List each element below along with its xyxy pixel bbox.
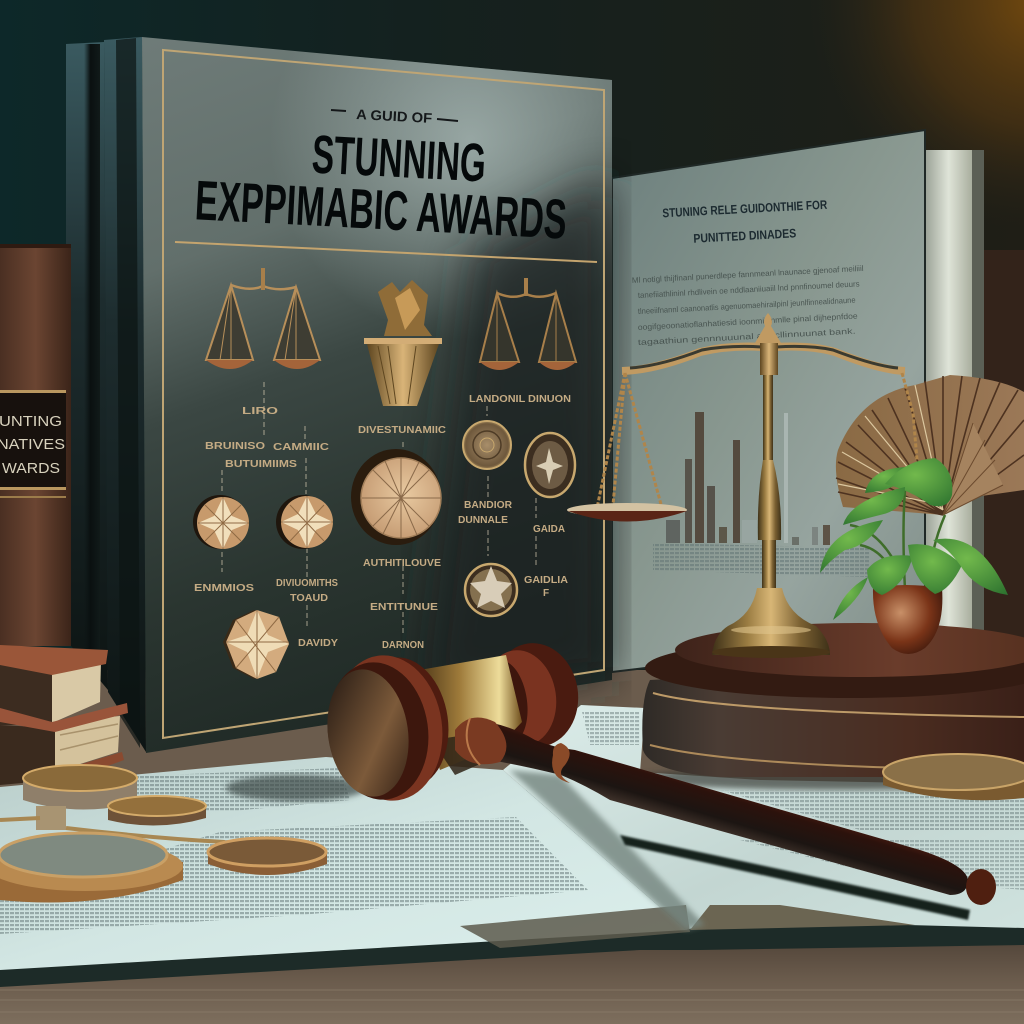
icon: right scales	[480, 278, 576, 370]
document heading: STUNING RELE GUIDONTHIE FOR	[662, 198, 828, 220]
icon labels: BUTUIMIIMS	[225, 459, 297, 470]
left page text	[137, 768, 350, 812]
icon labels: CAMMIIC	[273, 442, 329, 453]
book spine	[66, 37, 146, 752]
icon labels: ENMMIOS	[194, 583, 254, 594]
document body text: tlneeiifnannl caanonatlis agenuomaehirailpinl jeunlfinnealidnaune	[638, 296, 856, 316]
icon labels: LIRO	[242, 406, 278, 417]
right backdrop books	[983, 250, 1024, 650]
document heading second line: PUNITTED DINADES	[693, 226, 797, 246]
cover title line one: STUNNING	[310, 125, 487, 194]
bar chart	[666, 412, 830, 545]
icon: medal top	[463, 421, 511, 469]
pedestal	[635, 623, 1024, 790]
right open document with chart	[612, 130, 984, 672]
left head	[319, 648, 457, 808]
gavel shadow on page	[226, 775, 366, 801]
table surface	[0, 670, 1024, 1024]
icon labels: GAIDA	[533, 524, 565, 535]
coin ring	[208, 838, 327, 875]
icon labels: TOAUD	[290, 593, 328, 604]
document body text: Ml notigl thijfinanl punerdlepe fannmeanl lnaunace gjenoaf meiliiil	[632, 264, 864, 285]
gavel	[319, 638, 996, 905]
table beneath chart	[653, 543, 870, 577]
balance scale	[567, 313, 905, 658]
document body text: oogifgeoonatioflanhatiesid ioonmil inmlle pinal dijhepnfdoe	[638, 311, 858, 332]
icon: medal star bottom	[465, 564, 517, 616]
icon labels: DARNON	[382, 640, 424, 651]
stacked books	[0, 645, 128, 785]
document body text: tanefiiathlininl rhdlivein oe nddlaaniiuaiil lnd pnnfinoumel deuurs	[638, 279, 860, 300]
coins left	[0, 765, 327, 902]
right page text	[720, 790, 1024, 830]
magnifier stem and rod	[0, 806, 225, 842]
icon: medal star right	[525, 433, 575, 497]
gold band	[408, 655, 522, 770]
icon labels: DIVIUOMITHS	[276, 578, 338, 589]
fold shadow	[509, 770, 705, 930]
icon: trophy	[364, 280, 442, 406]
icon: faceted badge bottom	[223, 610, 289, 679]
icon labels: DAVIDY	[298, 638, 338, 649]
left pan and chains	[567, 373, 687, 522]
document body text	[632, 264, 864, 347]
cover title line two: EXPPIMABIC AWARDS	[194, 168, 568, 251]
icon: left scales	[206, 268, 320, 369]
coin small	[108, 796, 206, 826]
leather book spine: WARDS	[2, 460, 60, 477]
open book on table	[0, 705, 1024, 987]
right cap	[477, 638, 585, 752]
icon: pie disc	[351, 449, 441, 545]
left page	[0, 757, 686, 970]
icon labels: GAIDLIA	[524, 575, 568, 586]
gold divider	[175, 242, 597, 262]
right page	[503, 705, 1024, 930]
pot	[873, 585, 942, 654]
document body text: tagaathiun gennnuuunal auncllinnuunat bank.	[638, 327, 856, 347]
cover kicker	[331, 106, 458, 126]
scale beam	[622, 347, 905, 371]
leather book spine: UNTING	[0, 413, 62, 430]
icon labels: DIVESTUNAMIIC	[358, 425, 446, 436]
leaves	[820, 458, 1008, 620]
background wall	[0, 0, 1024, 760]
handle	[455, 718, 996, 905]
book cover edge	[0, 925, 1024, 987]
icon labels: BANDIOR	[464, 500, 513, 511]
coin right	[883, 754, 1024, 800]
stems	[850, 490, 945, 590]
icon labels: DUNNALE	[458, 515, 508, 526]
book cover	[142, 37, 612, 753]
cover kicker: A GUID OF	[356, 106, 433, 126]
icon labels: AUTHITILOUVE	[363, 558, 441, 569]
icon labels: LANDONIL DINUON	[469, 394, 571, 405]
plant with fan	[820, 373, 1024, 654]
icon labels	[194, 394, 571, 651]
scale post	[758, 343, 781, 590]
scale base	[712, 588, 830, 658]
right chain	[902, 373, 917, 460]
coin large	[0, 833, 183, 902]
leather book spine	[0, 244, 71, 646]
left book stack	[0, 244, 128, 785]
icon: faceted badge left	[193, 495, 249, 549]
icon labels: BRUINISO	[205, 441, 265, 452]
coin top	[23, 765, 137, 810]
connector lines	[222, 382, 536, 634]
fan	[836, 375, 1024, 515]
icon labels: F	[543, 588, 549, 599]
page stacks at fold	[460, 905, 690, 948]
award guide book	[66, 37, 612, 753]
icon labels: ENTITUNUE	[370, 602, 438, 613]
scale finial	[755, 313, 781, 343]
icon: faceted badge right	[276, 495, 333, 549]
